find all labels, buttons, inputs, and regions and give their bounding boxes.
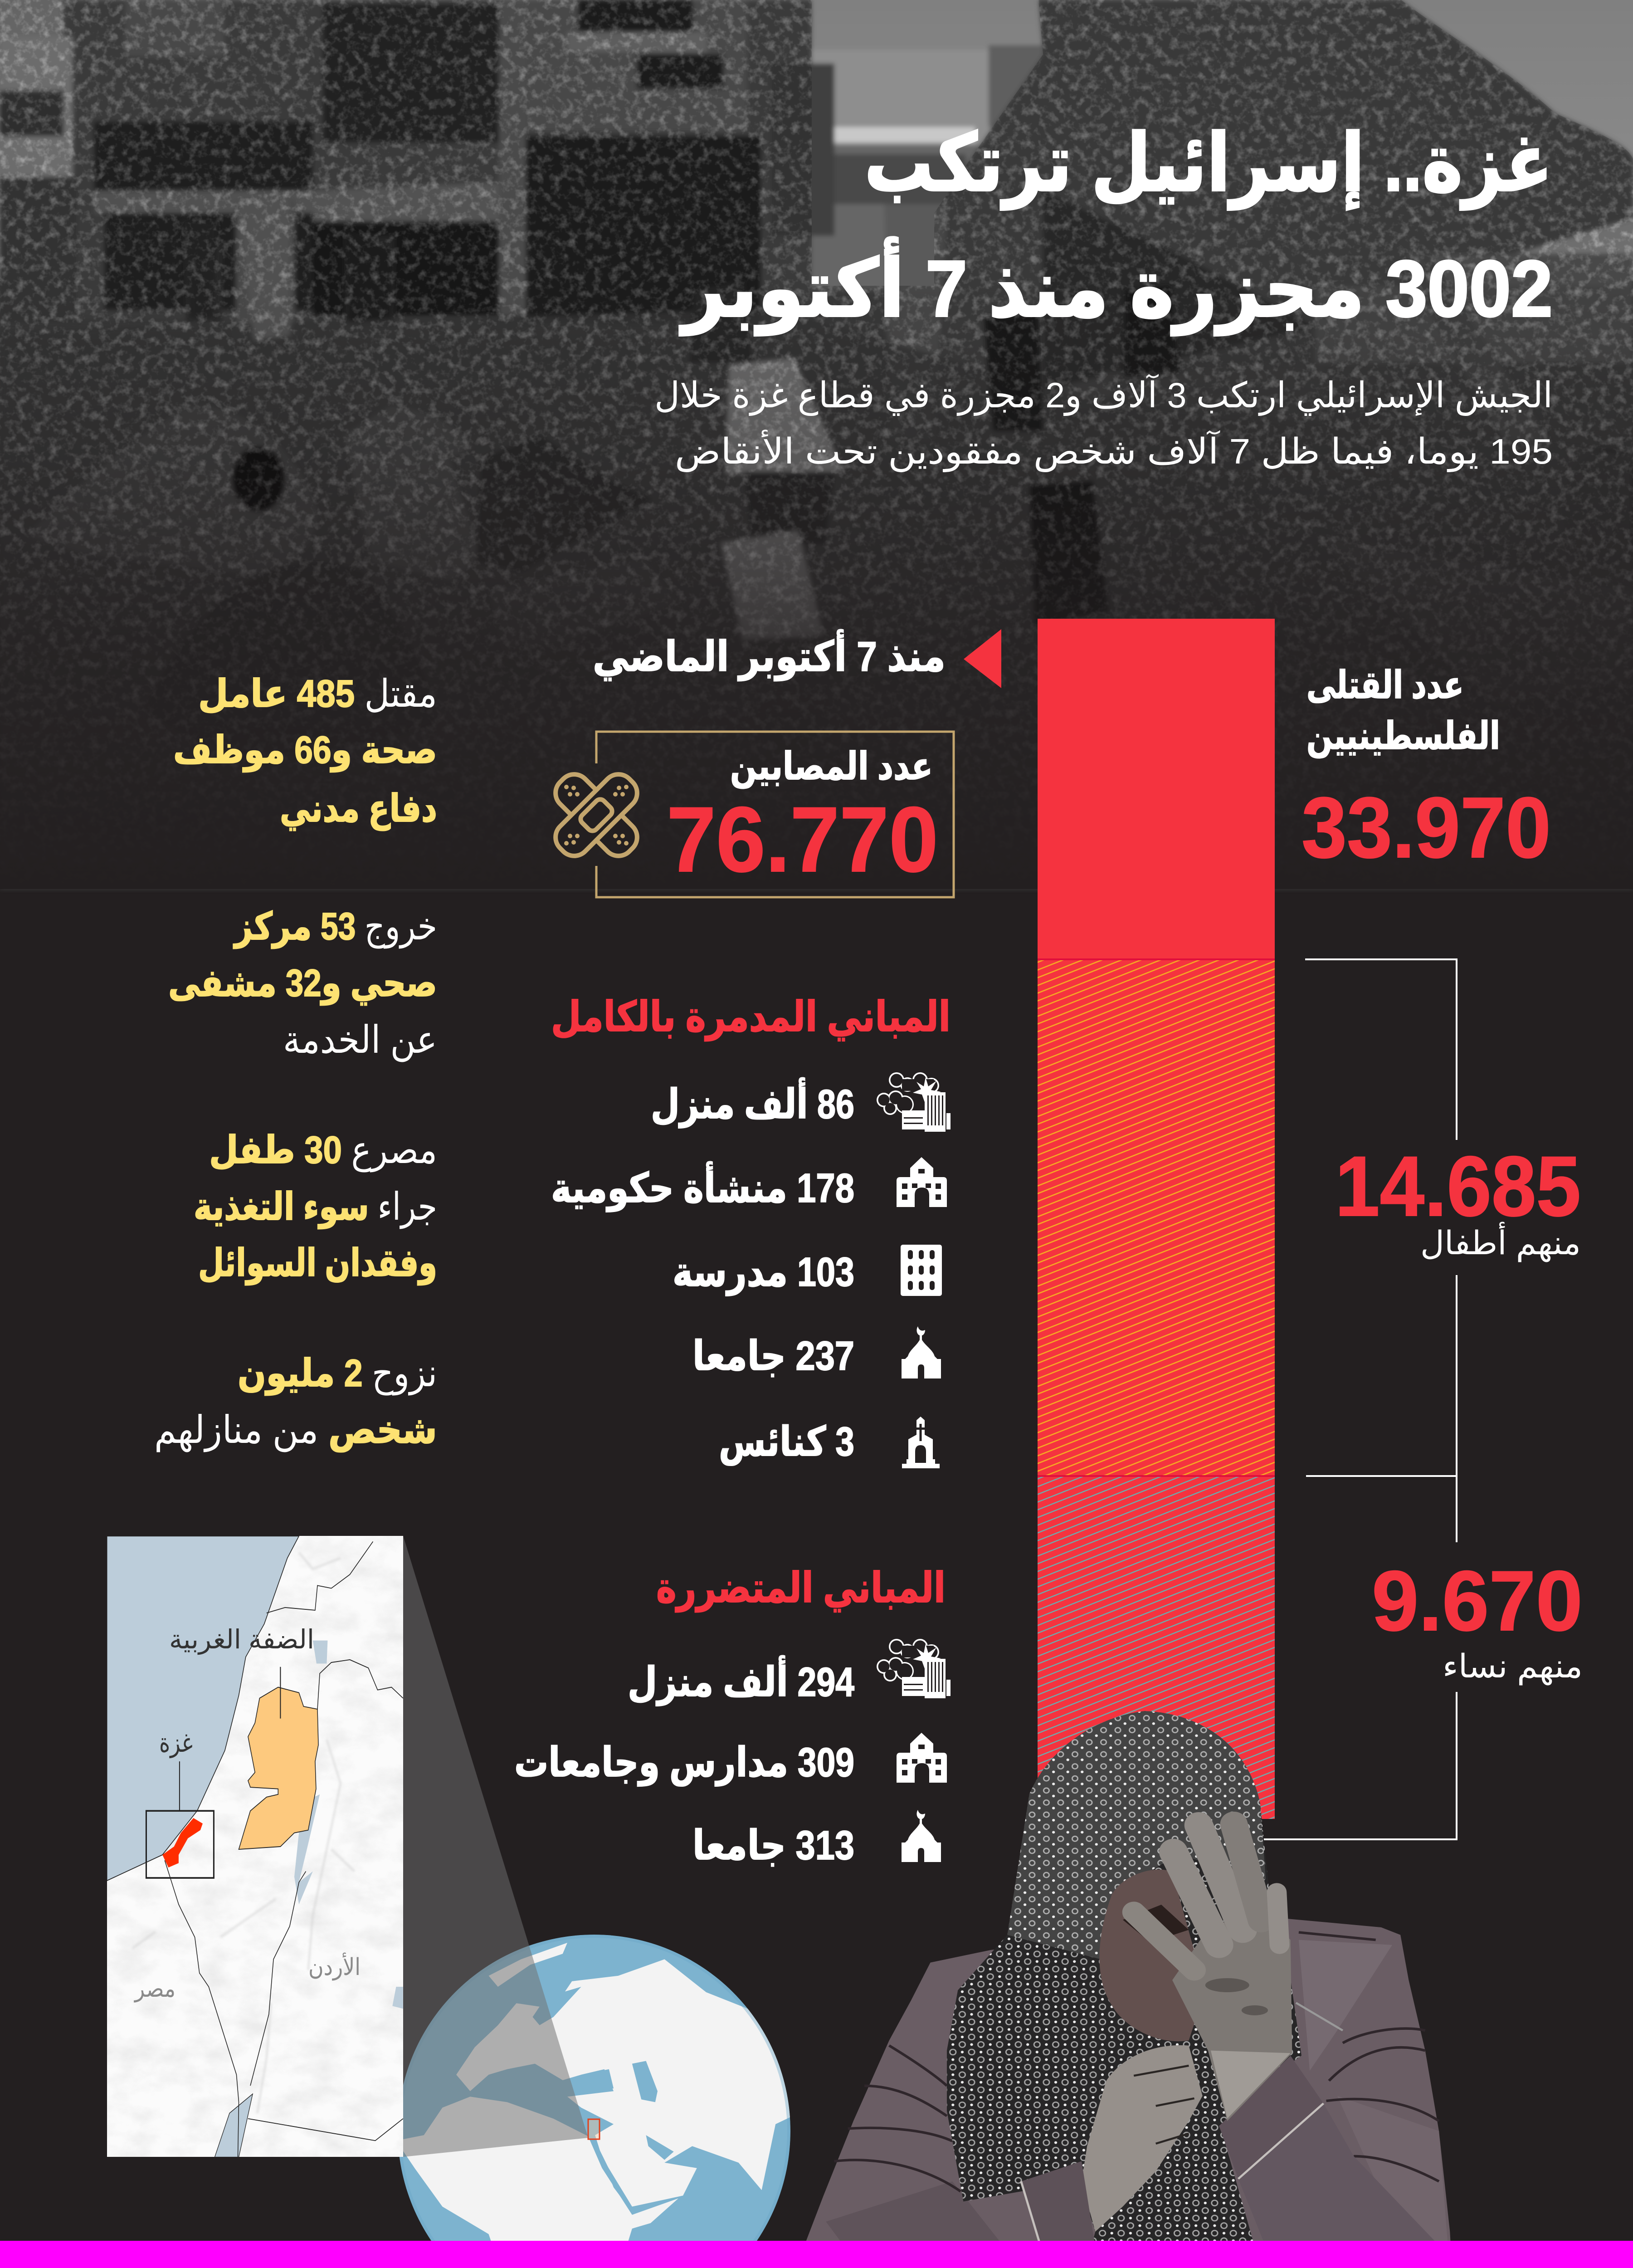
damaged buildings list: [514, 1655, 854, 1868]
displaced people: شخص من منازلهم: [154, 1408, 437, 1452]
west bank: [239, 1687, 318, 1849]
palestinians killed: [1302, 664, 1551, 876]
destroyed buildings list: 103 مدرسة: [673, 1250, 854, 1296]
globe: [399, 1935, 790, 2241]
children malnutrition deaths: جراء سوء التغذية: [194, 1185, 437, 1229]
displaced people: [154, 1352, 437, 1452]
mountain shading: [132, 1553, 355, 2113]
intro text: 195 يوما، فيما ظل 7 آلاف شخص مفقودين تحت الأنقاض: [675, 430, 1553, 473]
children killed: منهم أطفال: [1420, 1222, 1581, 1262]
since 7 october label: منذ 7 أكتوبر الماضي: [593, 629, 946, 681]
wounded box: [596, 732, 954, 897]
title: [679, 119, 1553, 336]
icon: mosque: [902, 1810, 941, 1862]
health workers killed: صحة و66 موظف: [173, 728, 437, 772]
health centers out of service: عن الخدمة: [283, 1018, 437, 1062]
children malnutrition deaths: مصرع 30 طفل: [209, 1129, 437, 1173]
hijab: [947, 1711, 1302, 2268]
left column statistics: [154, 672, 437, 1452]
health workers killed: دفاع مدني: [280, 787, 437, 831]
children killed: 14.685: [1335, 1139, 1581, 1234]
children malnutrition deaths: وفقدان السوائل: [198, 1242, 437, 1286]
destroyed buildings heading: المباني المدمرة بالكامل: [551, 994, 951, 1041]
icon: mosque: [902, 1326, 941, 1378]
icon: bombed houses: [877, 1639, 951, 1698]
gaza strip: [162, 1818, 203, 1867]
icon: church: [902, 1417, 940, 1468]
fist: [1082, 2045, 1203, 2232]
displaced people: نزوح 2 مليون: [238, 1352, 437, 1396]
dress: [804, 1919, 1555, 2268]
health centers out of service: خروج 53 مركز: [233, 905, 437, 949]
icon: government building: [897, 1157, 947, 1207]
health centers out of service: صحي و32 مشفى: [168, 962, 437, 1006]
palestinians killed: عدد القتلى: [1306, 664, 1464, 706]
women killed: 9.670: [1372, 1553, 1583, 1648]
right forearm and cuff: [1238, 2103, 1450, 2268]
intro text: الجيش الإسرائيلي ارتكب 3 آلاف و2 مجزرة في قطاع غزة خلال: [654, 374, 1553, 416]
left cuff: [1021, 2161, 1095, 2268]
stacked casualties bar: [1038, 619, 1275, 1819]
damaged buildings list: 309 مدارس وجامعات: [514, 1740, 854, 1787]
map: [107, 1536, 403, 2157]
women killed: منهم نساء: [1443, 1648, 1583, 1686]
wounded box: عدد المصابين: [730, 745, 933, 789]
arrow marker: [964, 629, 1001, 688]
icon: bandages: [549, 768, 643, 862]
borders: [165, 1541, 403, 2157]
palestinians killed: 33.970: [1302, 780, 1551, 876]
map label: gaza: غزة: [159, 1728, 193, 1759]
destroyed buildings list: 237 جامعا: [692, 1334, 854, 1379]
damaged buildings heading: المباني المتضررة: [656, 1565, 946, 1613]
intro text: [654, 374, 1553, 473]
icon: school: [901, 1245, 942, 1296]
wounded box: 76.770: [667, 788, 938, 891]
icon: government building: [897, 1733, 947, 1783]
background photo: destroyed buildings and rubble: [0, 0, 1633, 889]
face: [1099, 1869, 1205, 2041]
bracket lines: [1247, 959, 1457, 1839]
map label: west bank: الضفة الغربية: [169, 1625, 314, 1655]
children malnutrition deaths: [194, 1129, 437, 1286]
zoom wedge from map to globe: [403, 1536, 588, 2157]
title: 3002 مجزرة منذ 7 أكتوبر: [679, 237, 1553, 336]
woman photo cut-out: [804, 1711, 1555, 2268]
health centers out of service: [168, 905, 437, 1062]
raised hand: [1134, 1824, 1292, 2121]
map label: jordan: الأردن: [308, 1952, 361, 1981]
destroyed buildings list: 178 منشأة حكومية: [551, 1161, 854, 1212]
destroyed buildings list: 86 ألف منزل: [651, 1077, 854, 1128]
globe locator: [588, 2119, 600, 2139]
health workers killed: [173, 672, 437, 831]
sea: [107, 1536, 299, 1881]
palestinians killed: الفلسطينيين: [1306, 714, 1500, 758]
damaged buildings list: 294 ألف منزل: [628, 1655, 854, 1706]
icon: bombed houses: [877, 1072, 951, 1132]
map label: egypt: مصر: [133, 1976, 175, 2003]
destroyed buildings list: 3 كنائس: [719, 1419, 854, 1465]
destroyed buildings list: [551, 1077, 854, 1465]
health workers killed: مقتل 485 عامل: [198, 672, 437, 715]
damaged buildings list: 313 جامعا: [692, 1823, 854, 1868]
